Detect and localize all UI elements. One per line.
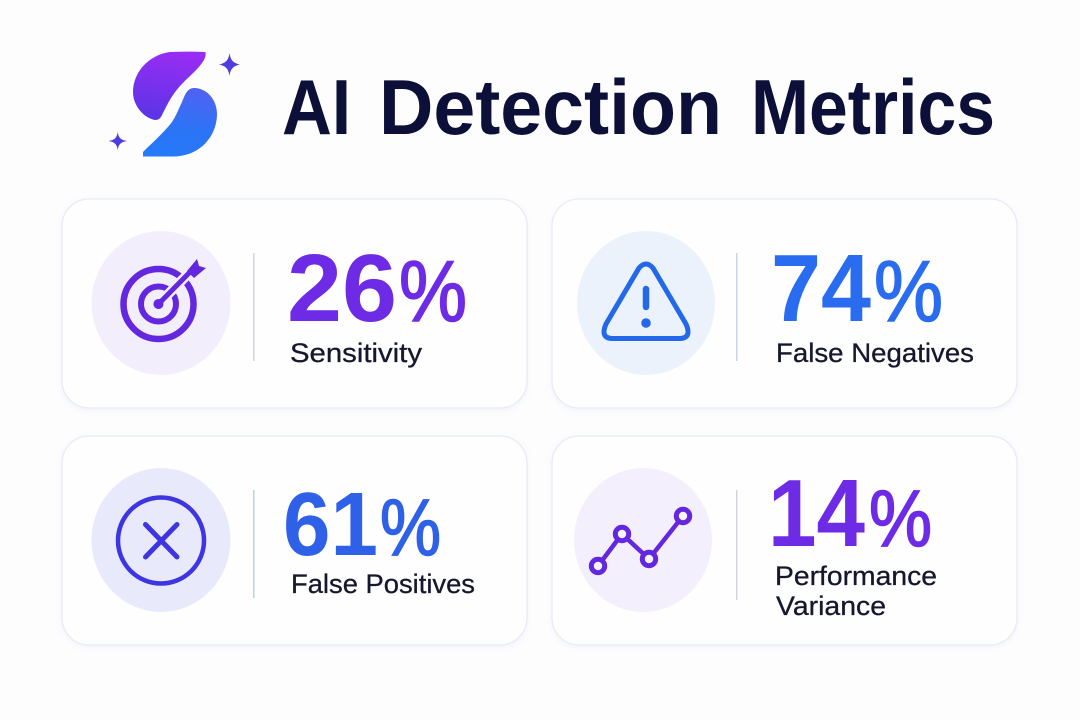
label: Sensitivity: Sensitivity [290,338,423,368]
value: 74% [771,235,943,342]
card background [62,199,527,408]
label: Performance Variance [775,561,937,621]
value: 14%: 14 [768,460,865,567]
value: 61% [283,475,441,575]
title: Detection [379,63,722,151]
value: 26%: % [399,244,467,340]
logo icon [108,52,240,156]
divider [253,253,254,361]
value: 74%: 74 [771,235,871,342]
icon: line chart [574,468,712,612]
title: AI [282,63,351,151]
value: 26%: 26 [287,235,397,342]
value: 26% [287,235,467,342]
icon: target with arrow [92,231,230,375]
title [282,63,995,151]
logo: blue swoosh [143,88,217,156]
value: 14%: % [869,474,932,563]
panel: performance variance [552,436,1017,645]
card background [552,199,1017,408]
card background [552,436,1017,645]
logo: large sparkle [219,53,240,76]
value: 14% [768,460,932,567]
title: Metrics [751,63,995,151]
panel: false positives [62,436,527,645]
icon: warning triangle [577,231,715,375]
divider [736,490,738,600]
value: 61%: % [380,483,441,572]
panel: sensitivity [62,199,527,408]
value: 74%: % [874,244,943,340]
divider [736,253,738,361]
label: False Negatives: False Negatives [776,338,974,368]
label: Performance Variance: Variance [776,591,886,621]
divider [253,490,254,598]
card background [62,436,527,645]
label: Performance Variance: Performance [775,561,937,591]
value: 61%: 61 [283,475,378,575]
logo: small sparkle [108,132,127,150]
logo: purple swoosh [133,52,206,120]
icon: circled X [92,468,230,612]
label: False Positives: False Positives [291,569,475,599]
panel: false negatives [552,199,1017,408]
